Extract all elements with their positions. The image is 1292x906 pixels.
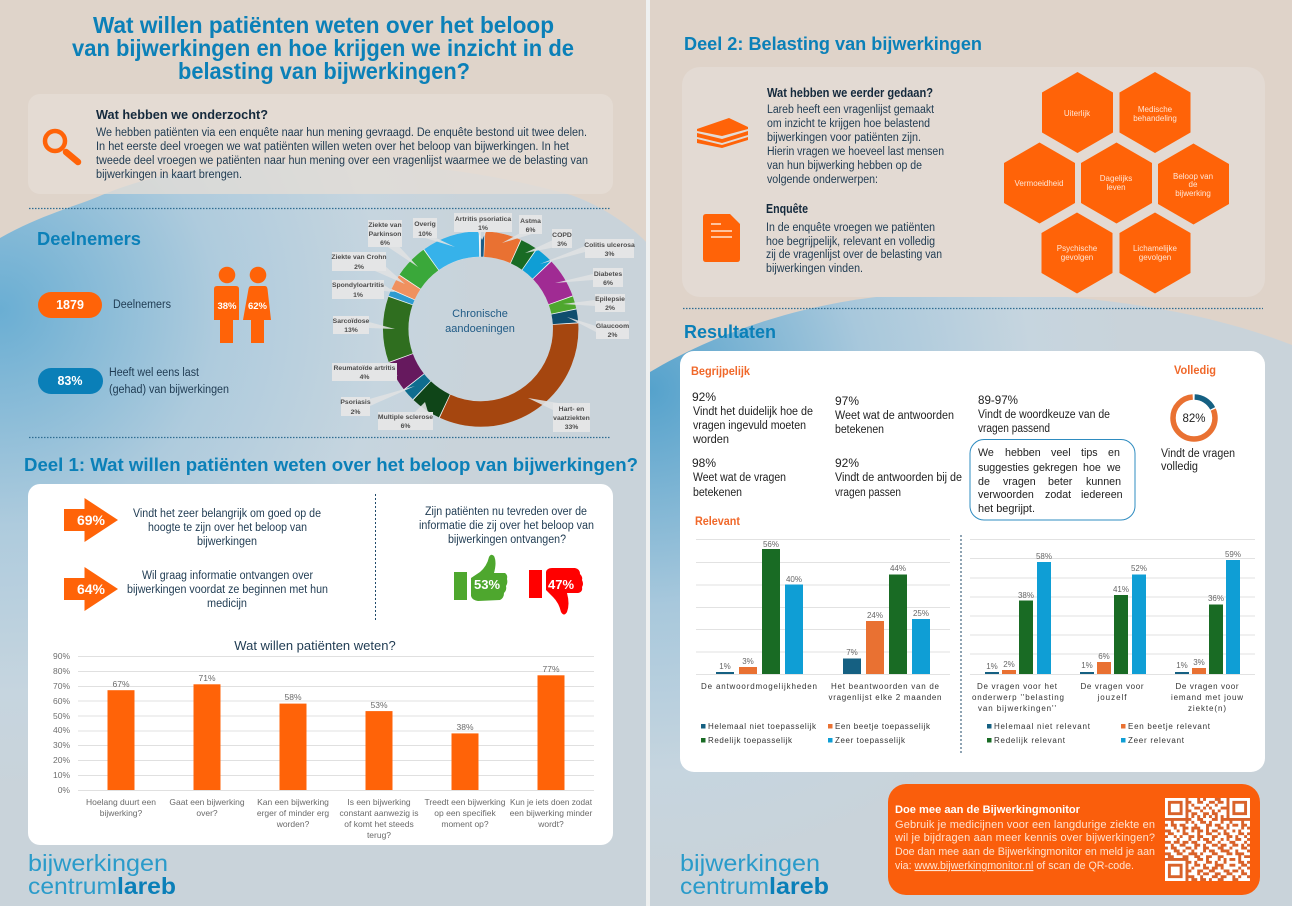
- icon: thumb up 53%: [454, 555, 507, 601]
- data labels: 2%: [605, 305, 615, 312]
- bar values: 24%: [867, 611, 883, 620]
- text: vindt de vragen volledig: Vindt de vragen: [1161, 448, 1235, 460]
- bar values: 56%: [763, 540, 779, 549]
- chart: toepasselijk: [696, 540, 950, 745]
- hexagons: onderwerpen: Uiterlijk: [1064, 109, 1091, 118]
- callout: tips en suggesties: de: [978, 476, 990, 488]
- icon: document: [703, 214, 740, 262]
- heading: volledig: Volledig: [1174, 365, 1216, 377]
- data labels: Reumatoïde artritis: [334, 365, 396, 372]
- bar values: 38%: [1018, 591, 1034, 600]
- heading: begrijpelijk: Begrijpelijk: [691, 366, 751, 378]
- text: 69% toelichting: Vindt het zeer belangrijk om goed op de: [133, 508, 321, 520]
- y axis: 40%: [53, 725, 70, 735]
- heading: deel 1: Deel 1: Wat willen patiënten weten over het beloop van bijwerkingen?: [24, 454, 638, 475]
- bar values: 44%: [890, 564, 906, 573]
- bars: [108, 675, 564, 790]
- text: tevredenheid vraag: [419, 506, 594, 546]
- result: 89-97% woordkeuze: Vindt de woordkeuze van de: [978, 409, 1110, 421]
- result: 92% duidelijk: [692, 390, 813, 446]
- category labels: ziekte(n): [1188, 704, 1226, 713]
- stat: 83% last van bijwerkingen: [38, 367, 229, 396]
- callout: tips en suggesties: gekregen: [1033, 462, 1078, 474]
- data labels: 10%: [418, 231, 432, 238]
- text: wat hebben we eerder gedaan: bijwerkingen voor patiënten zijn.: [767, 132, 921, 144]
- category labels: De vragen voor het: [977, 682, 1058, 691]
- hexagons: onderwerpen: leven: [1106, 183, 1126, 192]
- panel: deel 1: [28, 484, 613, 845]
- result: 89-97% woordkeuze: vragen passend: [978, 423, 1050, 435]
- hexagons: onderwerpen: Psychische: [1057, 244, 1098, 253]
- category labels: [86, 797, 593, 840]
- arrow: 69%: [64, 498, 118, 542]
- logo: right: bijwerkingen: [680, 850, 820, 876]
- y axis: 60%: [53, 696, 70, 706]
- callout: tips en suggesties: verwoorden: [978, 489, 1034, 501]
- legend: Een beetje relevant: [1128, 722, 1211, 731]
- category labels: Treedt een bijwerking: [424, 797, 506, 807]
- data labels: 4%: [360, 374, 369, 381]
- result: 92% duidelijk: vragen ingevuld moeten: [693, 420, 806, 432]
- text: oproep: via: www.bijwerkingmonitor.nl of scan de QR-code.: [895, 860, 1134, 872]
- y axis: 20%: [53, 755, 70, 765]
- result: 92% duidelijk: worden: [692, 434, 729, 446]
- y axis: 80%: [53, 666, 70, 676]
- text: vindt de vragen volledig: [1161, 448, 1235, 473]
- data labels: Hart- en: [559, 406, 584, 413]
- stat: 83% last van bijwerkingen: (gehad) van bijwerkingen: [109, 384, 229, 396]
- data labels: 2%: [351, 409, 360, 416]
- legend: Helemaal niet toepasselijk: [708, 722, 817, 731]
- text: vindt de vragen volledig: volledig: [1161, 461, 1198, 473]
- category labels: onderwerp ''belasting: [972, 693, 1064, 702]
- logo: right: lareb: [769, 873, 829, 899]
- stat: 1879 deelnemers: Deelnemers: [113, 299, 171, 311]
- category labels: constant aanwezig is: [340, 808, 418, 818]
- text: oproep: Gebruik je medicijnen voor een langdurige ziekte en: [895, 819, 1155, 831]
- data labels: 2%: [354, 264, 364, 271]
- icon: man and woman 38% / 62%: [214, 267, 271, 343]
- data labels: Artritis psoriatica: [455, 216, 511, 223]
- bars: [716, 549, 930, 674]
- icon: man and woman 38% / 62%: 38%: [217, 301, 237, 312]
- text: 64% toelichting: Wil graag informatie ontvangen over: [142, 570, 313, 582]
- result: 92% antwoorden passen: [835, 456, 962, 499]
- arrow: 64%: 64%: [77, 581, 106, 597]
- callout: tips en suggesties: we: [1106, 462, 1121, 474]
- hexagons: onderwerpen: Medische: [1138, 105, 1173, 114]
- bar values: 40%: [786, 575, 802, 584]
- legend: [987, 722, 1211, 745]
- category labels: Kan een bijwerking: [257, 797, 329, 807]
- category labels: terug?: [367, 830, 391, 840]
- category labels: Het beantwoorden van de: [831, 682, 940, 691]
- text: 64% toelichting: [127, 570, 328, 610]
- legend: [701, 722, 931, 745]
- result: 92% antwoorden passen: vragen passen: [835, 487, 901, 499]
- bar values: 59%: [1225, 550, 1241, 559]
- legend: Redelijk toepasselijk: [708, 736, 793, 745]
- text: wat hebben we eerder gedaan: Wat hebben we eerder gedaan?: [767, 86, 933, 100]
- bar values: 58%: [1036, 552, 1052, 561]
- data labels: Spondyloartritis: [332, 282, 384, 289]
- hexagons: onderwerpen: [1004, 72, 1229, 294]
- data labels: Colitis ulcerosa: [584, 242, 635, 249]
- chart: relevant: [970, 540, 1255, 745]
- callout: tips en suggesties: vragen: [1003, 476, 1036, 488]
- text block: onderzoek: In het eerste deel vroegen we wat patiënten willen weten over het beloop van bijwerkingen. In het: [96, 141, 570, 153]
- text: 64% toelichting: medicijn: [207, 598, 247, 610]
- result: 92% antwoorden passen: Vindt de antwoorden bij de: [835, 472, 962, 484]
- result: 92% antwoorden passen: 92%: [835, 456, 859, 470]
- hexagons: onderwerpen: gevolgen: [1061, 253, 1093, 262]
- data labels: 3%: [557, 241, 567, 248]
- hexagons: onderwerpen: Beloop van: [1173, 172, 1213, 181]
- panel: deel 2: [682, 67, 1265, 297]
- title: Wat willen patiënten weten over het beloop: [93, 12, 554, 38]
- text: oproep: Doe dan mee aan de Bijwerkingmonitor en meld je aan: [895, 846, 1155, 858]
- text: wat hebben we eerder gedaan: van hun bijwerking hebben op de: [767, 160, 922, 172]
- icon: thumb down 47%: 47%: [548, 577, 574, 592]
- text: enquete: bijwerkingen vinden.: [766, 263, 863, 275]
- bar values: 7%: [846, 648, 858, 657]
- hexagons: onderwerpen: Dagelijks: [1100, 174, 1132, 183]
- bars: [985, 560, 1240, 674]
- data labels: Multiple sclerose: [378, 414, 433, 421]
- category labels: of komt het steeds: [344, 819, 414, 829]
- y axis: [53, 651, 70, 795]
- legend: Een beetje toepasselijk: [835, 722, 931, 731]
- heading: doe mee: Doe mee aan de Bijwerkingmonitor: [895, 804, 1081, 816]
- arrow: 69%: 69%: [77, 512, 106, 528]
- result: 92% duidelijk: Vindt het duidelijk hoe de: [693, 406, 813, 418]
- panel: doe mee aan de bijwerkingmonitor: [888, 784, 1260, 895]
- icon: QR code: [1165, 798, 1250, 881]
- background: left page: [0, 0, 646, 906]
- result: 98% vragen: betekenen: [693, 487, 742, 499]
- stat: 83% last van bijwerkingen: 83%: [57, 374, 83, 388]
- category labels: De vragen voor: [1176, 682, 1239, 691]
- legend: Zeer relevant: [1128, 736, 1185, 745]
- category labels: De vragen voor: [1080, 682, 1144, 691]
- category labels: erger of minder erg: [257, 808, 329, 818]
- category labels: De antwoordmogelijkheden: [701, 682, 817, 691]
- text: wat hebben we eerder gedaan: Hierin vragen we hoeveel last mensen: [767, 146, 944, 158]
- category labels: vragenlijst elke 2 maanden: [828, 693, 942, 702]
- category labels: van bijwerkingen'': [978, 704, 1056, 713]
- category labels: jouzelf: [1096, 693, 1127, 702]
- panel: wat hebben we onderzocht: [28, 94, 613, 194]
- hexagons: onderwerpen: behandeling: [1133, 114, 1177, 123]
- text: wat hebben we eerder gedaan: volgende onderwerpen:: [767, 174, 878, 186]
- y axis: 70%: [53, 681, 70, 691]
- callout: tips en suggesties: veel: [1051, 447, 1071, 459]
- text block: onderzoek: [96, 127, 588, 181]
- heading: deelnemers: Deelnemers: [37, 228, 141, 249]
- text: 64% toelichting: bijwerkingen voordat ze beginnen met hun: [127, 584, 328, 596]
- result: 89-97% woordkeuze: [978, 393, 1110, 435]
- data labels: COPD: [552, 232, 572, 239]
- bar values: [112, 664, 560, 732]
- callout: tips en suggesties: hoe: [1083, 462, 1101, 474]
- data labels: Glaucoom: [596, 323, 629, 330]
- donut ring: [396, 244, 566, 414]
- donut centre label: [445, 308, 515, 335]
- data labels: 6%: [380, 240, 390, 247]
- category labels: wordt?: [537, 819, 564, 829]
- data labels: 33%: [565, 424, 578, 431]
- result: 97% antwoorden: Weet wat de antwoorden: [835, 410, 954, 422]
- category labels: worden?: [276, 819, 310, 829]
- callout: tips en suggesties: suggesties: [978, 462, 1029, 474]
- text: wat hebben we eerder gedaan: Lareb heeft een vragenlijst gemaakt: [767, 104, 935, 116]
- text: enquete: zij de vragenlijst over de belasting van: [766, 249, 942, 261]
- stat: 1879 deelnemers: 1879: [56, 298, 84, 312]
- data labels: Sarcoïdose: [333, 318, 370, 325]
- logo: left: lareb: [117, 873, 176, 899]
- bar values: 6%: [1098, 652, 1110, 661]
- category labels: Is een bijwerking: [347, 797, 411, 807]
- bar values: 36%: [1208, 594, 1224, 603]
- chart: donut chronische aandoeningen: [331, 213, 635, 432]
- result: 98% vragen: Weet wat de vragen: [693, 472, 786, 484]
- text: enquete: [766, 202, 942, 275]
- category labels: moment op?: [441, 819, 489, 829]
- icon: stack of papers: [697, 118, 748, 148]
- text: oproep: wil je bijdragen aan meer kennis over bijwerkingen?: [894, 832, 1155, 844]
- hexagons: onderwerpen: gevolgen: [1139, 253, 1171, 262]
- bar values: 41%: [1113, 585, 1129, 594]
- icon: magnifying glass: [45, 131, 78, 162]
- heading: deel 2: Deel 2: Belasting van bijwerkingen: [684, 33, 982, 54]
- callout: tips en suggesties: iedereen: [1081, 489, 1123, 501]
- result: 89-97% woordkeuze: 89-97%: [978, 393, 1018, 407]
- chart: wat willen patienten weten: [53, 638, 594, 840]
- category labels: [701, 682, 942, 702]
- stat: 83% last van bijwerkingen: Heeft wel eens last: [109, 367, 200, 379]
- arrow: 64%: [64, 567, 118, 611]
- data labels: 1%: [478, 225, 488, 232]
- legend: Redelijk relevant: [994, 736, 1066, 745]
- bar values: 25%: [913, 609, 929, 618]
- y axis: 0%: [58, 785, 70, 795]
- text: 69% toelichting: [133, 508, 321, 548]
- text: wat hebben we eerder gedaan: [767, 86, 944, 186]
- data labels: vaatziekten: [553, 415, 590, 422]
- bar values: 52%: [1131, 564, 1147, 573]
- data labels: [331, 213, 635, 432]
- icon: man and woman 38% / 62%: 62%: [248, 301, 268, 312]
- text: enquete: Enquête: [766, 202, 808, 216]
- chart title: Wat willen patiënten weten?: [234, 638, 396, 653]
- text: enquete: hoe begrijpelijk, relevant en volledig: [766, 236, 935, 248]
- y axis: 50%: [53, 711, 70, 721]
- data labels: 6%: [603, 280, 613, 287]
- data labels: Diabetes: [594, 271, 622, 278]
- result: 98% vragen: 98%: [692, 456, 716, 470]
- category labels: bijwerking?: [100, 808, 143, 818]
- category labels: Kun je iets doen zodat: [510, 797, 593, 807]
- y axis: 30%: [53, 740, 70, 750]
- bar values: 1%: [986, 662, 998, 671]
- callout: tips en suggesties: beter: [1048, 476, 1073, 488]
- title: [72, 12, 574, 84]
- text block: onderzoek: We hebben patiënten via een enquête naar hun mening gevraagd. De enquête bestond uit twee delen.: [96, 127, 587, 139]
- category labels: een bijwerking minder: [510, 808, 593, 818]
- icon: thumb up 53%: 53%: [474, 577, 500, 592]
- data labels: 13%: [344, 327, 358, 334]
- bar values: 67%: [112, 679, 130, 689]
- y axis: 90%: [53, 651, 70, 661]
- logo: left: centrum: [28, 873, 117, 899]
- category labels: over?: [196, 808, 218, 818]
- hexagons: onderwerpen: Lichamelijke: [1133, 244, 1178, 253]
- donut centre label: aandoeningen: [445, 323, 515, 335]
- title: van bijwerkingen en hoe krijgen we inzicht in de: [72, 35, 574, 61]
- bar values: 71%: [198, 673, 216, 683]
- data labels: 6%: [526, 227, 535, 234]
- callout: tips en suggesties: hebben: [1005, 447, 1041, 459]
- data labels: Astma: [520, 218, 541, 225]
- bar values: 1%: [719, 662, 731, 671]
- donut centre label: Chronische: [452, 308, 508, 320]
- text block: onderzoek: tweede deel vroegen we patiënten naar hun mening over een vragenlijst waarmee we de belasting van: [96, 155, 588, 167]
- text: 69% toelichting: bijwerkingen: [197, 536, 257, 548]
- callout: tips en suggesties: tips: [1081, 447, 1098, 459]
- callout: tips en suggesties: We: [978, 447, 994, 459]
- logo: right: [680, 850, 829, 899]
- result: 92% duidelijk: 92%: [692, 390, 716, 404]
- result: 97% antwoorden: [835, 394, 954, 436]
- stat: 1879 deelnemers: [38, 292, 171, 318]
- bar values: 53%: [370, 700, 388, 710]
- heading: relevant: Relevant: [695, 516, 740, 528]
- data labels: Epilepsie: [595, 296, 625, 303]
- text: enquete: In de enquête vroegen we patiënten: [766, 222, 935, 234]
- data labels: 3%: [605, 251, 614, 258]
- hexagons: onderwerpen: de: [1189, 180, 1198, 189]
- chart: volledig donut 82%: 82%: [1182, 413, 1206, 425]
- hexagons: onderwerpen: Vermoeidheid: [1015, 179, 1063, 188]
- callout: tips en suggesties: het begrijpt.: [978, 503, 1035, 515]
- callout: tips en suggesties: kunnen: [1086, 476, 1121, 488]
- data labels: 2%: [608, 332, 617, 339]
- text: tevredenheid vraag: informatie die zij over het beloop van: [419, 520, 594, 532]
- legend: Helemaal niet relevant: [994, 722, 1091, 731]
- category labels: iemand met jouw: [1171, 693, 1243, 702]
- panel: resultaten: [680, 351, 1265, 772]
- bar values: 1%: [1081, 661, 1093, 670]
- legend: Zeer toepasselijk: [835, 736, 906, 745]
- category labels: [972, 682, 1243, 713]
- bar values: 58%: [284, 692, 302, 702]
- text: tevredenheid vraag: bijwerkingen ontvangen?: [448, 534, 566, 546]
- data labels: 1%: [353, 292, 363, 299]
- leader lines: [366, 232, 596, 412]
- heading: resultaten: Resultaten: [684, 321, 776, 342]
- icon: thumb down 47%: [529, 568, 583, 614]
- bar values: [986, 550, 1241, 671]
- callout: tips en suggesties: en: [1108, 447, 1120, 459]
- text: 69% toelichting: hoogte te zijn over het beloop van: [148, 522, 307, 534]
- y axis: 10%: [53, 770, 70, 780]
- title: belasting van bijwerkingen?: [178, 58, 470, 84]
- category labels: Gaat een bijwerking: [169, 797, 245, 807]
- category labels: op een specifiek: [434, 808, 496, 818]
- result: 97% antwoorden: 97%: [835, 394, 859, 408]
- result: 98% vragen: [692, 456, 786, 499]
- data labels: 6%: [401, 423, 410, 430]
- callout: tips en suggesties: [970, 440, 1135, 520]
- callout: tips en suggesties: zodat: [1045, 489, 1071, 501]
- text block: onderzoek: bijwerkingen in kaart brengen.: [96, 169, 242, 181]
- logo: left: [28, 850, 176, 899]
- bar values: [719, 540, 929, 671]
- background: right page: [650, 0, 1292, 906]
- hexagons: onderwerpen: bijwerking: [1175, 189, 1211, 198]
- data labels: Psoriasis: [340, 399, 371, 406]
- logo: left: bijwerkingen: [28, 850, 168, 876]
- heading: wat hebben we onderzocht: Wat hebben we onderzocht?: [96, 108, 268, 122]
- bar values: 3%: [742, 657, 754, 666]
- bar values: 1%: [1176, 661, 1188, 670]
- data labels: Ziekte van: [368, 222, 402, 229]
- text: tevredenheid vraag: Zijn patiënten nu tevreden over de: [425, 506, 587, 518]
- bar values: 2%: [1003, 660, 1015, 669]
- text: oproep: [894, 819, 1155, 872]
- chart: volledig donut 82%: [1173, 397, 1215, 439]
- data labels: Overig: [414, 221, 436, 228]
- logo: right: centrum: [680, 873, 769, 899]
- result: 97% antwoorden: betekenen: [835, 424, 884, 436]
- data labels: Parkinson: [369, 231, 401, 238]
- bar values: 77%: [542, 664, 560, 674]
- bar values: 3%: [1193, 658, 1205, 667]
- category labels: Hoelang duurt een: [86, 797, 156, 807]
- data labels: Ziekte van Crohn: [331, 254, 387, 261]
- text: wat hebben we eerder gedaan: om inzicht te krijgen hoe belastend: [767, 118, 930, 130]
- bar values: 38%: [456, 722, 474, 732]
